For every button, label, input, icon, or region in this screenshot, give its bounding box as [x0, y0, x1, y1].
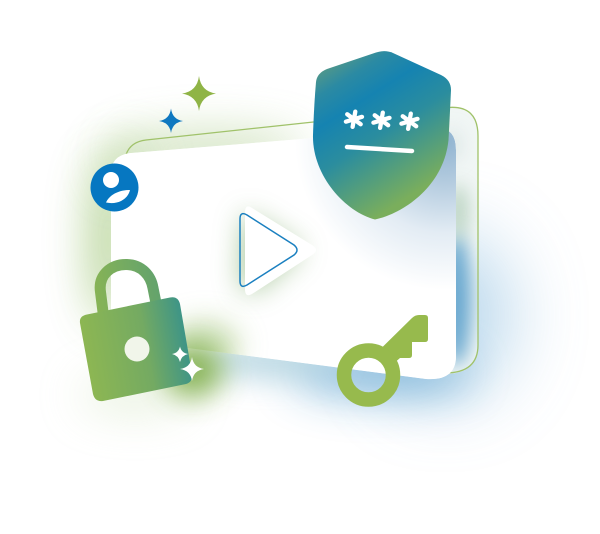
play button white triangle: [245, 206, 316, 295]
play button glow: [240, 212, 304, 292]
play button: [240, 206, 316, 295]
video card: [111, 128, 456, 379]
right band between card and outline: [449, 108, 478, 374]
icon: key: [344, 315, 428, 400]
icon: green sparkle: [182, 76, 216, 111]
password asterisks: [345, 110, 418, 130]
padlock body: [80, 297, 192, 401]
lock sparkle small: [172, 346, 188, 362]
padlock shackle: [100, 264, 156, 312]
icon: user avatar: [90, 164, 138, 212]
icon: padlock: [80, 264, 204, 401]
background glows: [80, 132, 510, 413]
icon: blue sparkle: [159, 108, 183, 133]
password line: [347, 147, 412, 151]
lock sparkle large: [180, 357, 204, 381]
glow beneath lock: [163, 342, 223, 398]
padlock keyhole: [124, 336, 150, 362]
outline frame: [126, 107, 478, 373]
icon: shield with password: [313, 51, 451, 219]
play button blue outline: [240, 214, 297, 286]
